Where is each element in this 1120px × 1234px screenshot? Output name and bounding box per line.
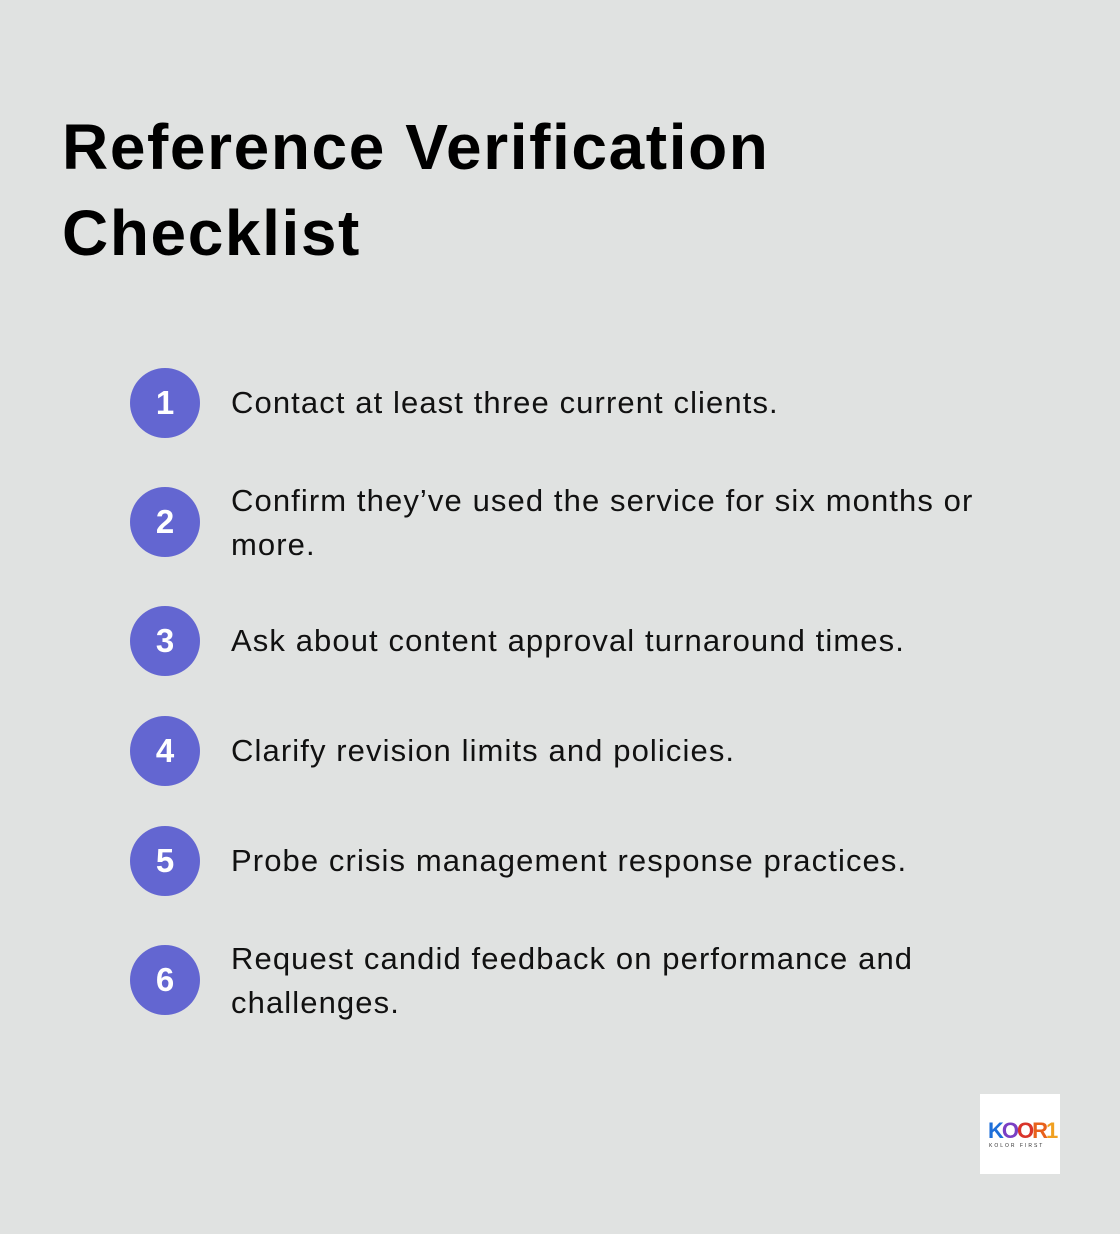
item 2 <box>130 483 973 562</box>
item 2: more. <box>231 527 316 562</box>
title <box>62 111 769 269</box>
item 6 <box>130 941 913 1020</box>
item 6: challenges. <box>231 985 400 1020</box>
item 5: 5 <box>156 842 174 879</box>
item 5: Probe crisis management response practices. <box>231 843 907 878</box>
logo: KOLOR FIRST <box>989 1143 1044 1149</box>
item 4 <box>130 716 735 786</box>
item 1: 1 <box>156 384 174 421</box>
item 5 <box>130 826 907 896</box>
item 4: 4 <box>156 732 174 769</box>
item 4: Clarify revision limits and policies. <box>231 733 735 768</box>
title: Reference Verification <box>62 111 769 183</box>
logo: KOOR1 <box>988 1118 1056 1143</box>
item 6: 6 <box>156 961 174 998</box>
item 2: Confirm they’ve used the service for six months or <box>231 483 973 518</box>
title: Checklist <box>62 197 361 269</box>
item 3: Ask about content approval turnaround times. <box>231 623 905 658</box>
item 1: Contact at least three current clients. <box>231 385 779 420</box>
item 2: 2 <box>156 503 174 540</box>
item 1 <box>130 368 779 438</box>
logo <box>980 1094 1060 1174</box>
item 3: 3 <box>156 622 174 659</box>
item 6: Request candid feedback on performance and <box>231 941 913 976</box>
item 3 <box>130 606 905 676</box>
